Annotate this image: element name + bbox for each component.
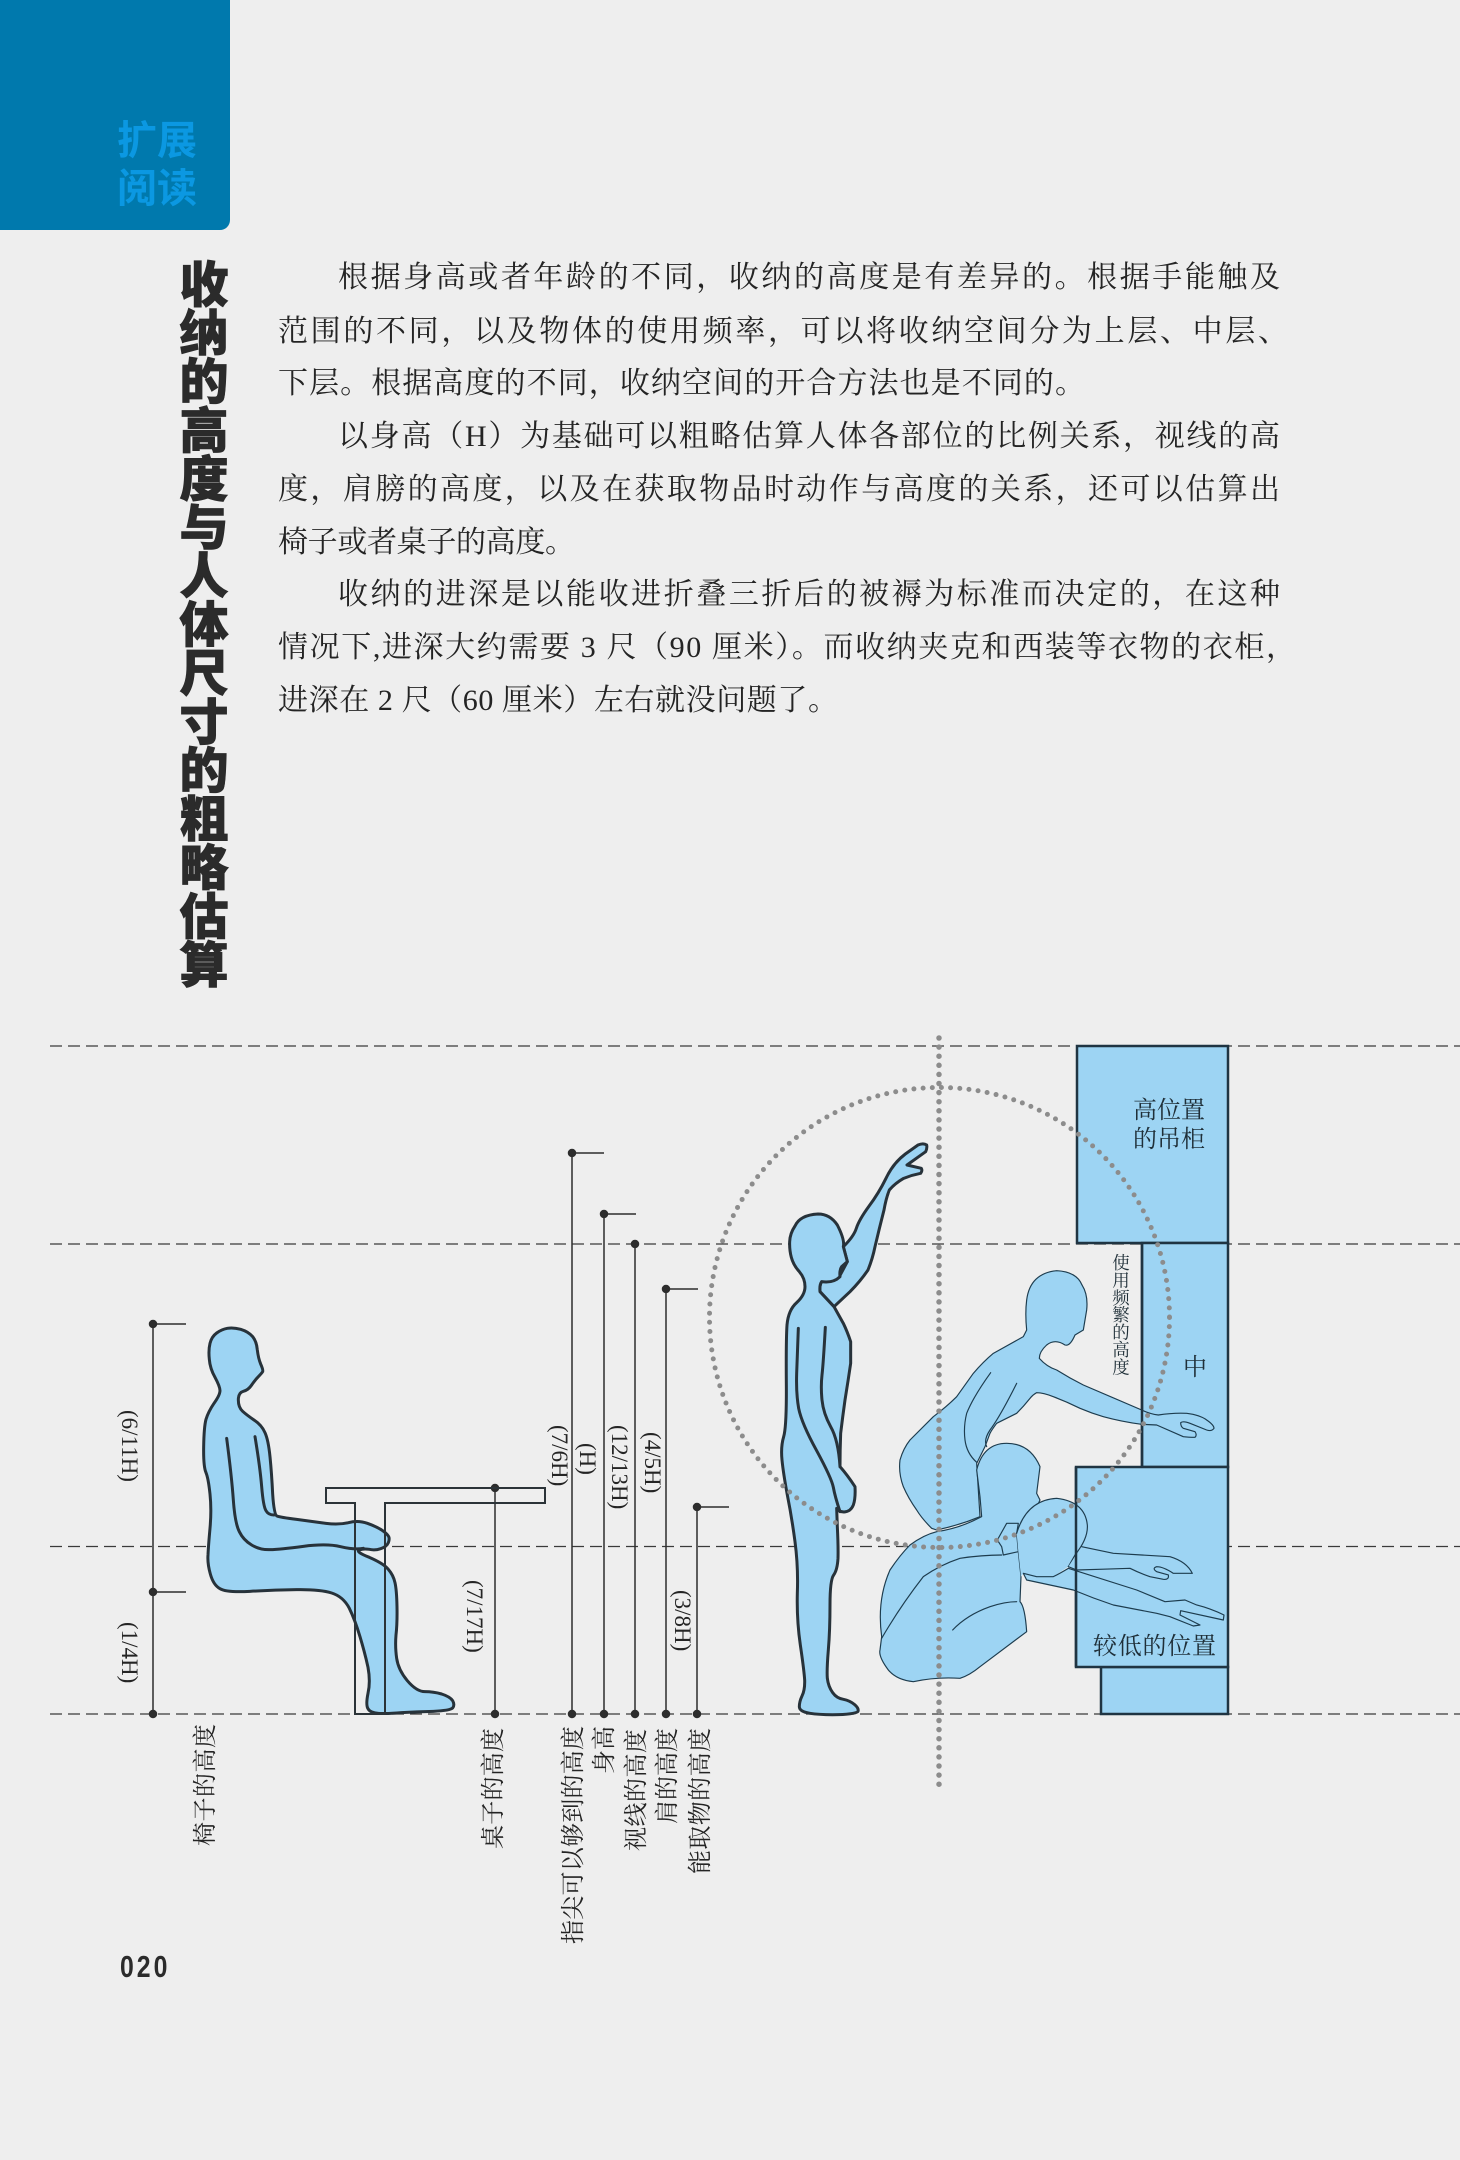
page number: 020: [120, 1949, 167, 1984]
height labels under floor line: 视线的高度: [623, 1729, 650, 1851]
cabinet labels: 较低的位置: [1093, 1633, 1216, 1660]
dimension ratio labels: (6/11H): [117, 1410, 142, 1482]
body text: 进深在 2 尺（60 厘米）左右就没问题了。: [278, 684, 838, 717]
body text: 以身高（H）为基础可以粗略估算人体各部位的比例关系，视线的高: [338, 420, 1280, 453]
dimension ratio labels: (7/6H): [547, 1425, 572, 1486]
height labels under floor line: 指尖可以够到的高度: [560, 1726, 587, 1944]
body text: [278, 261, 1296, 717]
standing figure reaching up: [782, 1144, 927, 1715]
body text: 度，肩膀的高度，以及在获取物品时动作与高度的关系，还可以估算出: [278, 473, 1280, 506]
height labels under floor line: 肩的高度: [654, 1728, 681, 1824]
cabinet labels: [1093, 1097, 1216, 1660]
body text: 下层。根据高度的不同，收纳空间的开合方法也是不同的。: [278, 367, 1085, 400]
dimension ratio labels: (7/17H): [462, 1580, 487, 1653]
height labels under floor line: 桌子的高度: [480, 1728, 507, 1849]
dimension ratio labels: (12/13H): [607, 1425, 632, 1509]
dotted vertical axis: [936, 1038, 942, 1793]
dotted reach circle: [710, 1088, 1170, 1548]
vertical title: 收纳的高度与人体尺寸的粗略估算: [179, 259, 229, 993]
dimension lines with dots: [150, 1150, 729, 1718]
cabinet: middle: [1142, 1243, 1228, 1467]
table: [326, 1488, 545, 1714]
body text: 根据身高或者年龄的不同，收纳的高度是有差异的。根据手能触及: [338, 261, 1280, 294]
dimension ratio labels: (1/4H): [117, 1622, 142, 1683]
dimension ratio labels: (4/5H): [640, 1432, 665, 1493]
cabinet: high: [1077, 1046, 1228, 1243]
seated figure: [204, 1328, 454, 1714]
cabinet labels: 中: [1183, 1354, 1207, 1381]
body text: 情况下,进深大约需要 3 尺（90 厘米）。而收纳夹克和西装等衣物的衣柜，: [278, 631, 1296, 664]
cabinet: low: [1076, 1467, 1228, 1667]
dimension ratio labels: (H): [575, 1443, 600, 1475]
header tab: extended reading: 阅读: [117, 167, 197, 211]
crouching and reaching figures: [880, 1271, 1224, 1682]
height labels under floor line: 椅子的高度: [192, 1724, 219, 1846]
dimension ratio labels: [117, 1410, 695, 1683]
header tab: extended reading: 扩展: [117, 119, 197, 163]
cabinet: base: [1101, 1667, 1228, 1714]
dimension ratio labels: (3/8H): [670, 1590, 695, 1651]
body text: 范围的不同，以及物体的使用频率，可以将收纳空间分为上层、中层、: [278, 315, 1288, 348]
cabinet labels: 的吊柜: [1133, 1126, 1205, 1153]
header tab: extended reading: [0, 0, 230, 230]
height labels under floor line: 身高: [591, 1726, 618, 1774]
cabinet labels: 高位置: [1133, 1097, 1205, 1124]
height labels under floor line: 能取物的高度: [687, 1728, 714, 1874]
body text: 椅子或者桌子的高度。: [278, 526, 575, 559]
body text: 收纳的进深是以能收进折叠三折后的被褥为标准而决定的，在这种: [338, 578, 1280, 611]
height labels under floor line: [192, 1724, 714, 1944]
vertical label: frequently used height: 使用频繁的高度: [1112, 1253, 1130, 1377]
